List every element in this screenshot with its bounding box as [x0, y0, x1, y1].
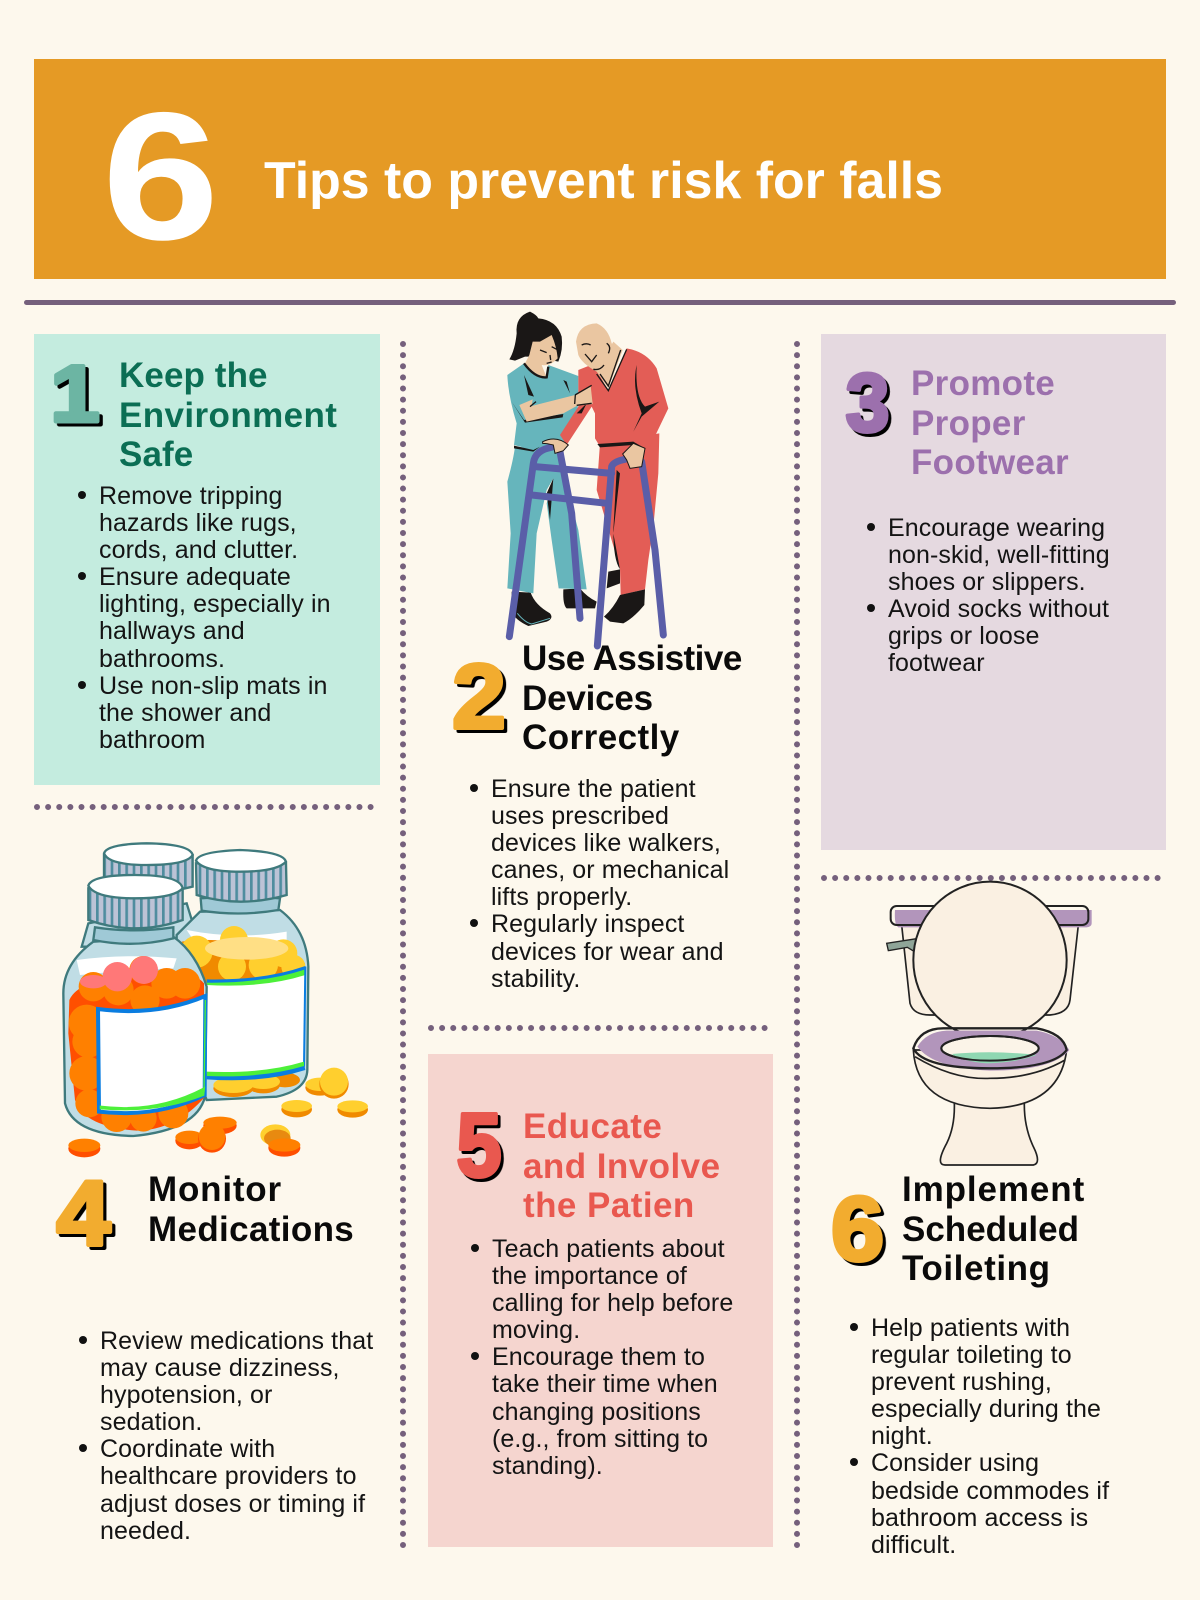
bullets: tip 5: standing). [492, 1452, 603, 1480]
heading: tip 6 [902, 1170, 1085, 1288]
bullets: tip 3 [867, 514, 1110, 677]
bullets: tip 4: sedation. [100, 1408, 202, 1436]
bullets: tip 1: hazards like rugs, [99, 509, 297, 537]
panel: tip 5 [428, 1054, 773, 1547]
illustration: toilet [886, 880, 1092, 1166]
number 5: 5 [456, 1095, 502, 1196]
bullets: tip 4: may cause dizziness, [100, 1354, 340, 1382]
bullets: tip 2: stability. [491, 965, 580, 993]
bullets: tip 1: Use non-slip mats in [99, 672, 327, 700]
right bottle highlight and pills [181, 926, 305, 1097]
heading: tip 2 [522, 639, 742, 757]
bullets: tip 6: Help patients with [871, 1314, 1070, 1342]
bullets: tip 3: Encourage wearing [888, 514, 1105, 542]
right bottle [177, 897, 308, 1100]
heading: tip 3 [911, 364, 1069, 482]
heading: tip 4 [148, 1170, 354, 1249]
banner [34, 59, 1166, 279]
bullets: tip 2: uses prescribed [491, 802, 669, 830]
bullets: tip 1: Ensure adequate [99, 563, 291, 591]
bullets: tip 6 [850, 1314, 1110, 1559]
heading: tip 6: Implement [902, 1170, 1085, 1209]
toilet bowl [913, 1050, 1067, 1108]
bullets: tip 4 [79, 1327, 373, 1545]
bullets: tip 6: difficult. [871, 1531, 956, 1559]
bullets: tip 2: Regularly inspect [491, 910, 684, 938]
bullets: tip 6: regular toileting to [871, 1341, 1072, 1369]
bullets: tip 5: Encourage them to [492, 1343, 705, 1371]
bullets: tip 1: bathrooms. [99, 645, 225, 673]
bullets: tip 4: healthcare providers to [100, 1462, 357, 1490]
bullets: tip 1: Remove tripping [99, 482, 283, 510]
bullets: tip 2: canes, or mechanical [491, 856, 729, 884]
patient back shoe [607, 569, 620, 588]
nurse arm [519, 386, 593, 422]
bullets: tip 2: devices for wear and [491, 938, 724, 966]
bullets: tip 5: calling for help before [492, 1289, 733, 1317]
bullets: tip 6: bathroom access is [871, 1504, 1088, 1532]
bullets: tip 4: hypotension, or [100, 1381, 272, 1409]
title: Tips to prevent risk for falls [264, 151, 943, 209]
heading: tip 1 [119, 356, 337, 474]
bullets: tip 6: Consider using [871, 1449, 1039, 1477]
bullets: tip 4: adjust doses or timing if [100, 1490, 365, 1518]
bullets: tip 1: hallways and [99, 617, 245, 645]
loose pills [68, 1068, 368, 1157]
bullets: tip 1: cords, and clutter. [99, 536, 298, 564]
bullets: tip 6: prevent rushing, [871, 1368, 1052, 1396]
bullets: tip 1: the shower and [99, 699, 271, 727]
number 3: 3 [846, 357, 889, 449]
heading: tip 2: Use Assistive [522, 639, 742, 678]
front bottle pills [68, 973, 205, 1131]
patient sweater [560, 348, 668, 450]
heading: tip 5: Educate [523, 1107, 662, 1146]
front bottle [63, 937, 207, 1136]
number 6: 6 [831, 1178, 884, 1280]
heading: tip 4: Monitor [148, 1170, 282, 1209]
heading: tip 5: and Involve [523, 1147, 721, 1186]
panel: tip 3 [821, 334, 1166, 850]
nurse face lines [540, 347, 557, 363]
heading: tip 5: the Patien [523, 1186, 695, 1225]
bullets: tip 6: night. [871, 1422, 933, 1450]
nurse hair and head [509, 312, 562, 362]
bullets: tip 3: shoes or slippers. [888, 568, 1086, 596]
back bottle [82, 843, 200, 947]
bullets: tip 3: Avoid socks without [888, 595, 1109, 623]
walker [509, 447, 663, 646]
bullets: tip 1: bathroom [99, 726, 205, 754]
front cap [88, 875, 183, 928]
bullets: tip 2: lifts properly. [491, 883, 632, 911]
bullets: tip 5: (e.g., from sitting to [492, 1425, 708, 1453]
right cap [196, 850, 287, 902]
right bottle label [207, 970, 305, 1076]
bullets: tip 4: Review medications that [100, 1327, 373, 1355]
illustration: medicine bottles [62, 842, 368, 1158]
bullets: tip 1: lighting, especially in [99, 590, 331, 618]
heading: tip 5 [523, 1107, 721, 1225]
bullets: tip 5: moving. [492, 1316, 580, 1344]
heading: tip 2: Devices [522, 679, 653, 718]
patient head [576, 323, 618, 373]
heading: tip 6: Scheduled [902, 1210, 1079, 1249]
bullets: tip 4: needed. [100, 1517, 191, 1545]
flush lever [887, 939, 920, 955]
front bottle label [98, 996, 205, 1113]
bullets: tip 6: especially during the [871, 1395, 1101, 1423]
toilet pedestal [940, 1103, 1038, 1165]
bullets: tip 3: footwear [888, 649, 985, 677]
heading: tip 1: Safe [119, 435, 193, 474]
bullets: tip 3: non-skid, well-fitting [888, 541, 1110, 569]
number 2: 2 [452, 645, 506, 748]
heading: tip 1: Keep the [119, 356, 268, 395]
patient pants [597, 433, 659, 595]
toilet seat [917, 1031, 1069, 1071]
big number 6: 6 [102, 74, 219, 278]
heading: tip 2: Correctly [522, 718, 680, 757]
panel: tip 1 [34, 334, 380, 785]
heading: tip 1: Environment [119, 396, 337, 435]
heading: tip 3: Footwear [911, 443, 1069, 482]
heading: tip 6: Toileting [902, 1249, 1051, 1288]
nurse top [507, 363, 578, 450]
bullets: tip 3: grips or loose [888, 622, 1039, 650]
bullets: tip 2: Ensure the patient [491, 775, 696, 803]
bullets: tip 5: take their time when [492, 1370, 718, 1398]
bullets: tip 4: Coordinate with [100, 1435, 275, 1463]
bullets: tip 5 [471, 1235, 733, 1480]
number 4: 4 [56, 1163, 111, 1265]
bullets: tip 5: the importance of [492, 1262, 687, 1290]
illustration: nurse helping patient with walker [506, 312, 668, 650]
seat opening [941, 1036, 1039, 1061]
bullets: tip 2: devices like walkers, [491, 829, 721, 857]
patient front shoe [604, 589, 645, 623]
nurse shoes [512, 588, 597, 626]
bullets: tip 6: bedside commodes if [871, 1477, 1109, 1505]
patient neck [597, 342, 623, 388]
bullets: tip 5: Teach patients about [492, 1235, 725, 1263]
heading: tip 4: Medications [148, 1210, 354, 1249]
bullets: tip 1 [78, 482, 331, 754]
toilet tank [902, 925, 1078, 1015]
heading: tip 3: Promote [911, 364, 1055, 403]
number 1: 1 [50, 349, 100, 440]
patient hands [543, 439, 568, 453]
heading: tip 3: Proper [911, 404, 1026, 443]
bullets: tip 5: changing positions [492, 1398, 701, 1426]
toilet lid [913, 882, 1067, 1038]
nurse pants [507, 447, 587, 593]
bullets: tip 2 [470, 775, 729, 993]
